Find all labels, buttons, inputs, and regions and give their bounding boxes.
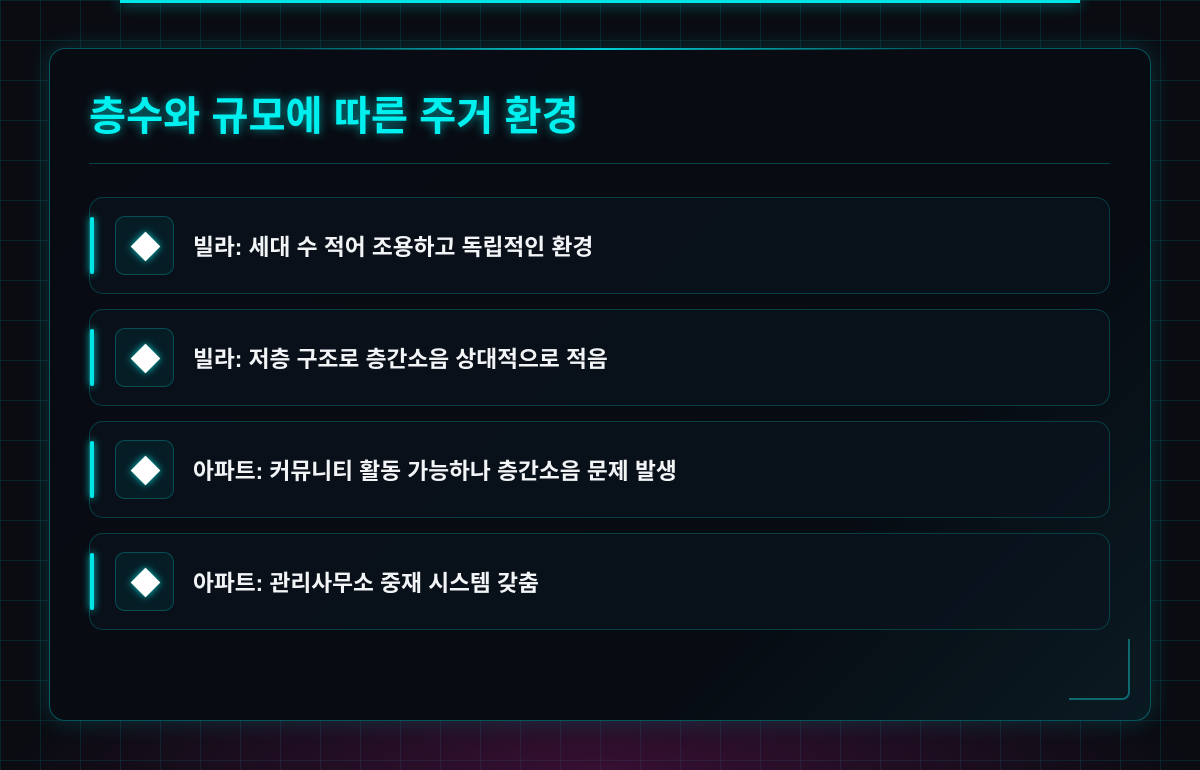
icon: diamond [115, 440, 174, 499]
icon: diamond [115, 552, 174, 611]
icon: diamond [115, 328, 174, 387]
item 4 [89, 533, 1110, 630]
text: 아파트: 커뮤니티 활동 가능하나 층간소음 문제 발생 [193, 458, 677, 484]
text: 아파트: 관리사무소 중재 시스템 갖춤 [193, 570, 539, 596]
icon: diamond [115, 216, 174, 275]
item 2 [89, 309, 1110, 406]
text: 빌라: 저층 구조로 층간소음 상대적으로 적음 [193, 346, 608, 372]
item 3 [89, 421, 1110, 518]
corner bracket [1069, 639, 1130, 700]
item 1 [89, 197, 1110, 294]
title: 층수와 규모에 따른 주거 환경 [89, 94, 579, 139]
text: 빌라: 세대 수 적어 조용하고 독립적인 환경 [193, 234, 593, 260]
